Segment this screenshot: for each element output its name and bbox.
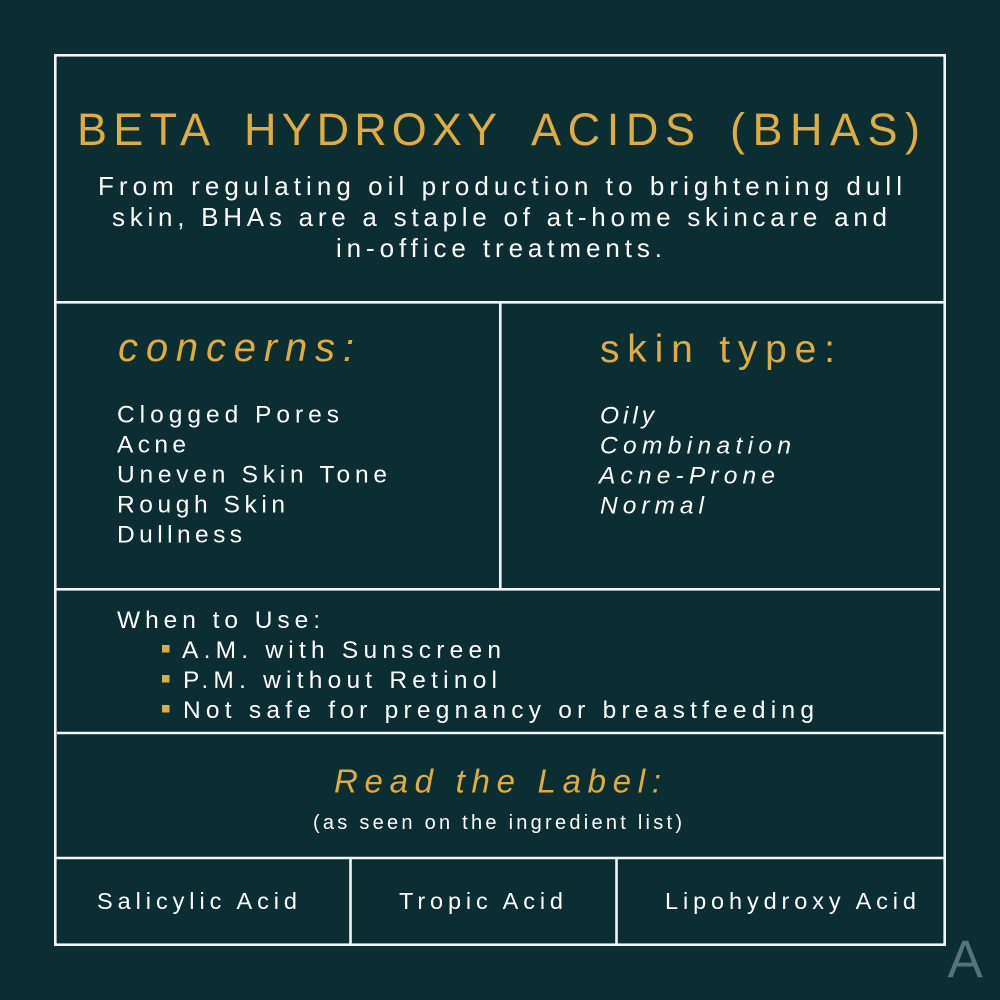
- concerns list: Dullness: [117, 522, 242, 548]
- intro text: in-office treatments.: [336, 233, 662, 263]
- skin type list: [597, 402, 791, 520]
- panel: when to use: [117, 607, 814, 724]
- concerns heading: concerns:: [118, 326, 354, 370]
- panel: read the label: [313, 762, 682, 834]
- skin type list: Oily: [600, 402, 656, 430]
- concerns list: Acne: [117, 432, 186, 458]
- panel: skin type: [597, 328, 835, 520]
- table frame and grid lines: [55, 55, 945, 946]
- skin type list: Combination: [600, 432, 791, 460]
- title: ACIDS: [531, 104, 695, 155]
- usage list: Not safe for pregnancy or breastfeeding: [183, 697, 814, 724]
- ingredient names: Tropic Acid: [399, 888, 563, 914]
- skin type list: Acne-Prone: [597, 462, 775, 490]
- ingredient names: [97, 888, 916, 914]
- usage list: P.M. without Retinol: [183, 667, 497, 694]
- read the label note: (as seen on the ingredient list): [313, 812, 682, 834]
- skin type heading: skin type:: [600, 328, 835, 371]
- intro text: [98, 171, 902, 263]
- icon: bullet squares: [162, 645, 170, 712]
- concerns list: Uneven Skin Tone: [117, 462, 387, 488]
- panel: concerns: [117, 326, 387, 548]
- skin type list: Normal: [600, 492, 705, 520]
- intro text: skin, BHAs are a staple of at-home skincare and: [112, 202, 887, 232]
- usage list: A.M. with Sunscreen: [182, 637, 501, 664]
- watermark logo: A: [948, 930, 984, 989]
- concerns list: Rough Skin: [117, 492, 285, 518]
- when to use heading: When to Use:: [117, 607, 320, 634]
- concerns list: Clogged Pores: [117, 402, 339, 428]
- intro text: From regulating oil production to brightening dull: [98, 171, 902, 201]
- concerns list: [117, 402, 387, 548]
- ingredient names: Lipohydroxy Acid: [665, 888, 916, 914]
- usage list: [182, 637, 814, 724]
- title: [77, 104, 920, 155]
- title: BETA: [77, 104, 210, 155]
- ingredient names: Salicylic Acid: [97, 888, 297, 914]
- title: (BHAS): [730, 104, 920, 155]
- read the label heading: Read the Label:: [334, 762, 661, 800]
- title: HYDROXY: [244, 104, 497, 155]
